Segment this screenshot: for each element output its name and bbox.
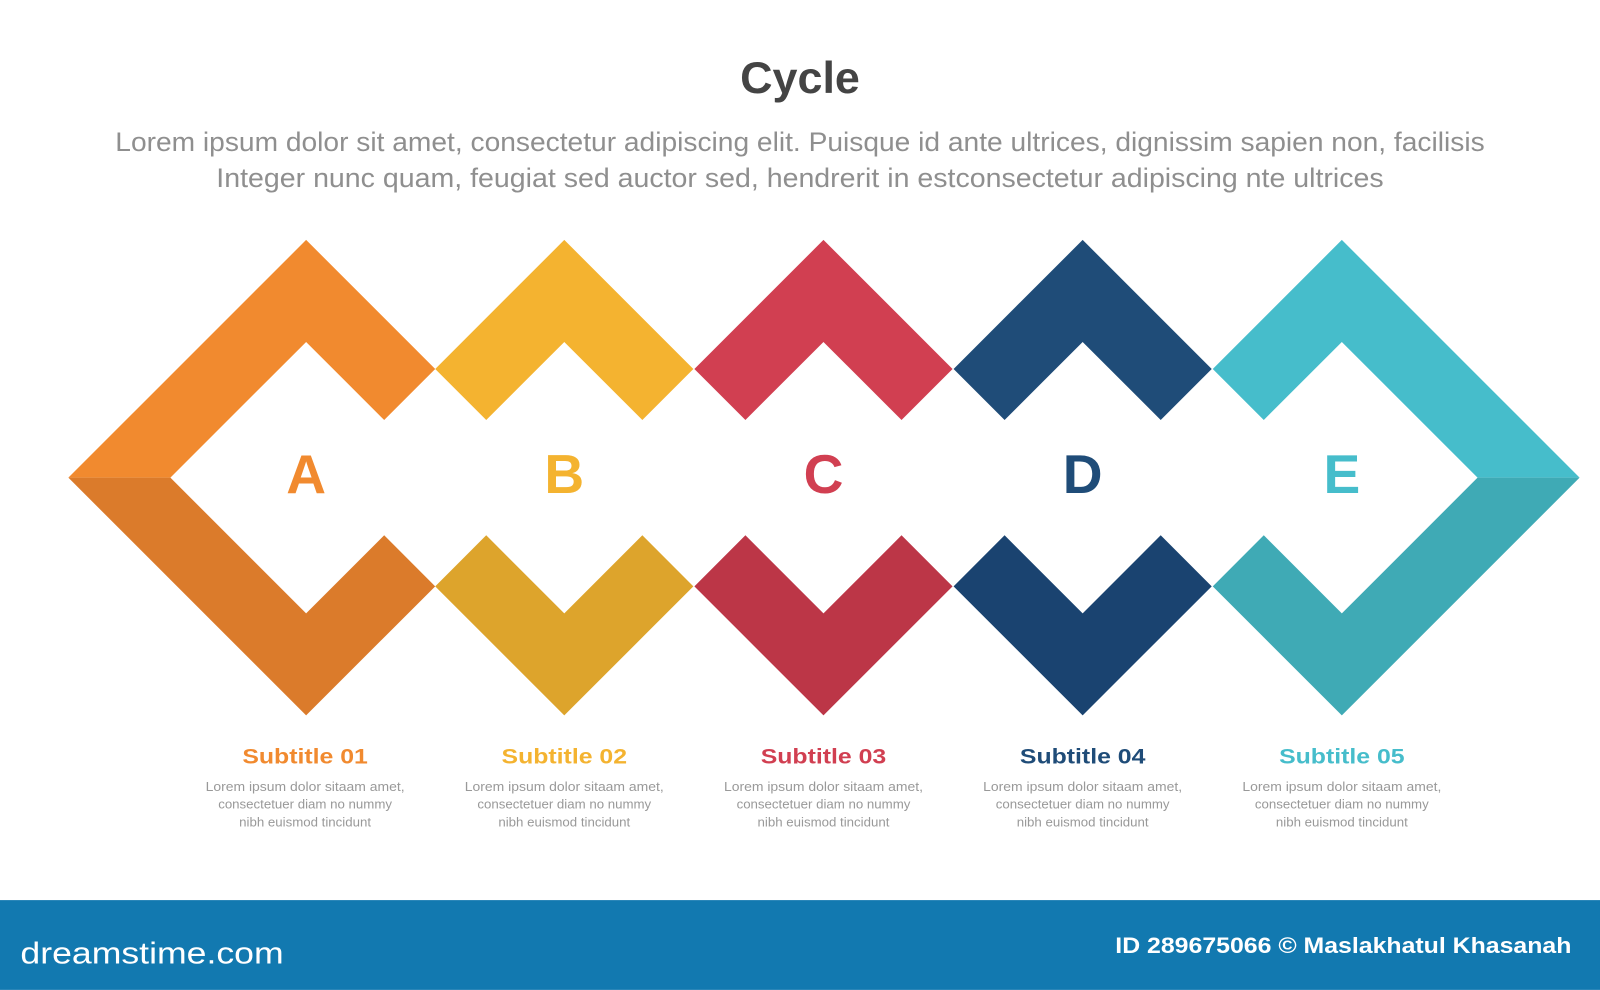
shape A: A — [286, 443, 326, 505]
step 2 text — [465, 744, 664, 830]
step 5 text — [1242, 744, 1441, 830]
step 4 text: Subtitle 04 — [1020, 744, 1146, 768]
footer credit text: ID 289675066 © Maslakhatul Khasanah — [1115, 933, 1571, 958]
shape C — [694, 240, 953, 715]
step 1 text: Lorem ipsum dolor sitaam amet, — [206, 779, 405, 794]
step 1 text: nibh euismod tincidunt — [239, 815, 371, 830]
step 5 text: consectetuer diam no nummy — [1255, 796, 1429, 811]
intro text — [115, 127, 1485, 193]
step 5 text: Lorem ipsum dolor sitaam amet, — [1242, 779, 1441, 794]
step 1 text: Subtitle 01 — [242, 744, 368, 768]
shape B — [435, 240, 693, 715]
step 4 text — [983, 744, 1182, 830]
title: Cycle — [740, 52, 860, 103]
step 3 text: Lorem ipsum dolor sitaam amet, — [724, 779, 923, 794]
shape D: D — [1063, 443, 1103, 505]
step 3 text — [724, 744, 923, 830]
step 1 text — [206, 744, 405, 830]
step 2 text: consectetuer diam no nummy — [477, 796, 652, 811]
shape A — [68, 240, 435, 715]
step 3 text: consectetuer diam no nummy — [737, 796, 911, 811]
step 4 text: consectetuer diam no nummy — [996, 796, 1170, 811]
shape B: B — [544, 443, 584, 505]
step 4 text: Lorem ipsum dolor sitaam amet, — [983, 779, 1182, 794]
step 5 text: Subtitle 05 — [1279, 744, 1405, 768]
step 3 text: nibh euismod tincidunt — [758, 815, 890, 830]
step 3 text: Subtitle 03 — [761, 744, 886, 768]
shape D — [954, 240, 1212, 715]
step 2 text: Lorem ipsum dolor sitaam amet, — [465, 779, 664, 794]
step 4 text: nibh euismod tincidunt — [1017, 815, 1149, 830]
step labels — [206, 744, 1441, 830]
footer banner — [0, 900, 1600, 990]
shape C: C — [804, 443, 843, 505]
intro text: Integer nunc quam, feugiat sed auctor sed, hendrerit in estconsectetur adipiscing nte ultrices — [216, 163, 1384, 193]
step 5 text: nibh euismod tincidunt — [1276, 815, 1408, 830]
shape E: E — [1323, 443, 1360, 505]
step 1 text: consectetuer diam no nummy — [218, 796, 392, 811]
cycle diagram — [68, 240, 1580, 715]
shape E — [1213, 240, 1580, 715]
step 2 text: Subtitle 02 — [502, 744, 627, 768]
intro text: Lorem ipsum dolor sit amet, consectetur adipiscing elit. Puisque id ante ultrices, dignissim sapien non, facilisis — [115, 127, 1485, 157]
footer logo text: dreamstime.com — [20, 936, 284, 970]
step 2 text: nibh euismod tincidunt — [498, 815, 631, 830]
